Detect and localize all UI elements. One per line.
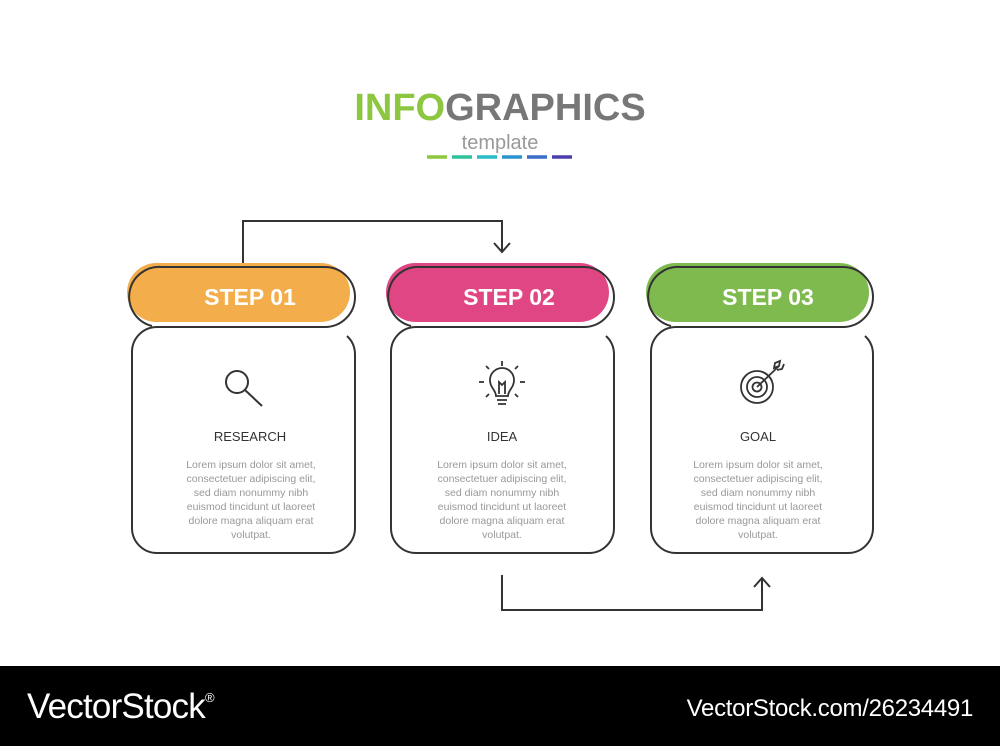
footer bar: VectorStock <box>27 687 205 726</box>
panel: step 03: sed diam nonummy nibh <box>701 487 815 499</box>
panel: step 02: dolore magna aliquam erat <box>440 515 565 527</box>
subtitle: template <box>462 132 538 154</box>
panel: step 03: dolore magna aliquam erat <box>696 515 821 527</box>
panel: step 02: euismod tincidunt ut laoreet <box>438 501 566 513</box>
panel: step 02: consectetuer adipiscing elit, <box>438 473 566 485</box>
panel: step 03: consectetuer adipiscing elit, <box>694 473 822 485</box>
color dash bar <box>427 155 572 159</box>
arrow: step1 to step2 <box>243 221 510 263</box>
panel: step 03: Lorem ipsum dolor sit amet, <box>693 459 823 471</box>
panel: step 01: consectetuer adipiscing elit, <box>186 473 316 485</box>
panel: step 01: RESEARCH <box>214 429 286 444</box>
icon: magnifier <box>226 371 262 406</box>
title: INFOGRAPHICS <box>354 87 646 129</box>
footer bar: VectorStock.com/26234491 <box>687 695 973 722</box>
panel: step 02 <box>386 263 614 553</box>
panel: step 01: volutpat. <box>231 529 271 541</box>
icon: light bulb <box>479 361 525 404</box>
title <box>354 87 646 154</box>
panel: step 01: Lorem ipsum dolor sit amet, <box>186 459 316 471</box>
panel: step 01: dolore magna aliquam erat <box>189 515 314 527</box>
panel: step 01: STEP 01 <box>204 284 296 310</box>
panel: step 03: volutpat. <box>738 529 778 541</box>
icon: target <box>741 361 784 403</box>
panel: step 03: GOAL <box>740 429 776 444</box>
footer bar <box>0 666 1000 746</box>
panel: step 01: euismod tincidunt ut laoreet <box>187 501 315 513</box>
panel: step 01: sed diam nonummy nibh <box>194 487 308 499</box>
panel: step 02: STEP 02 <box>463 284 555 310</box>
footer bar: ® <box>205 690 215 705</box>
panel: step 02: IDEA <box>487 429 517 444</box>
panel: step 03: STEP 03 <box>722 284 814 310</box>
panel: step 02: volutpat. <box>482 529 522 541</box>
panel: step 01 <box>127 263 355 553</box>
arrow: step2 to step3 <box>502 575 770 610</box>
panel: step 03: euismod tincidunt ut laoreet <box>694 501 822 513</box>
panel: step 02: Lorem ipsum dolor sit amet, <box>437 459 567 471</box>
panel: step 03 <box>646 263 873 553</box>
panel: step 02: sed diam nonummy nibh <box>445 487 559 499</box>
